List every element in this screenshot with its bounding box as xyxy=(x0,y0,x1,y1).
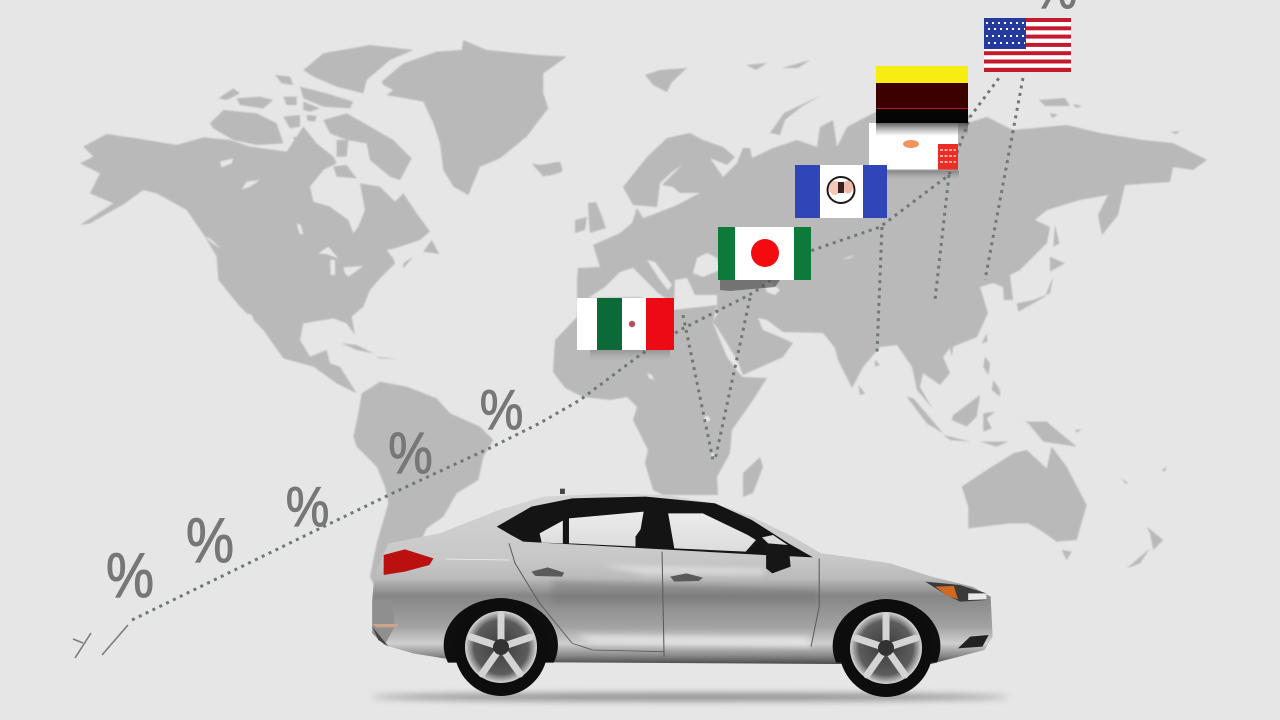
broken tail of the tariff line xyxy=(73,625,128,658)
East Asia and Oceania islands xyxy=(858,225,1167,568)
rear door handle xyxy=(531,567,564,577)
side mirror xyxy=(762,535,791,573)
rear quarter window xyxy=(540,521,563,543)
roof antenna xyxy=(560,489,565,494)
island: Madagascar xyxy=(743,457,763,497)
front vent xyxy=(958,635,989,648)
percent sign 2: % xyxy=(186,506,234,576)
dotted drop from Japan to Africa xyxy=(715,298,750,460)
dotted tariff lines xyxy=(132,78,1023,620)
tail light xyxy=(384,549,433,575)
world map xyxy=(80,40,1207,597)
flag: yellow, maroon, black xyxy=(876,66,968,136)
rear door window xyxy=(569,512,644,547)
emblem xyxy=(828,177,854,203)
main rising dotted line xyxy=(132,78,999,620)
windows frame xyxy=(497,497,813,557)
flag: white, green, white, red xyxy=(577,298,674,360)
African lakes xyxy=(647,373,715,457)
continent: North America xyxy=(80,40,567,393)
headrest xyxy=(636,525,674,549)
islands: UK and Arctic xyxy=(545,60,1180,233)
flag: USA xyxy=(984,18,1071,72)
continent: Africa xyxy=(553,297,767,495)
rear wheel xyxy=(454,598,548,696)
percent sign 5: % xyxy=(480,379,523,442)
percent sign 3: % xyxy=(286,476,329,539)
seas cut into Eurasia xyxy=(585,253,855,310)
wheel arches xyxy=(444,598,940,663)
dotted drop from red flag xyxy=(935,175,949,300)
continent: Eurasia xyxy=(577,100,1207,408)
dotted drop from Mexico to Africa xyxy=(683,315,713,460)
percent sign 4: % xyxy=(388,422,433,486)
percent sign 1: % xyxy=(106,541,154,611)
car xyxy=(372,489,993,697)
flag: white with red block xyxy=(869,123,959,179)
front wheel xyxy=(839,599,933,697)
flag: green and white with red disc xyxy=(718,227,811,291)
dotted drop from USA xyxy=(985,78,1023,280)
flag: blue and white with emblem xyxy=(795,165,887,218)
front door window xyxy=(668,513,756,552)
headlight xyxy=(925,582,987,602)
car ground shadow xyxy=(372,693,1008,701)
door lines xyxy=(446,543,819,657)
dotted drop from blue flag xyxy=(877,227,882,353)
percent signs rising along the tariff line xyxy=(106,0,1077,611)
continent: South America xyxy=(353,382,493,597)
front door handle xyxy=(670,573,703,582)
car body xyxy=(372,488,993,664)
